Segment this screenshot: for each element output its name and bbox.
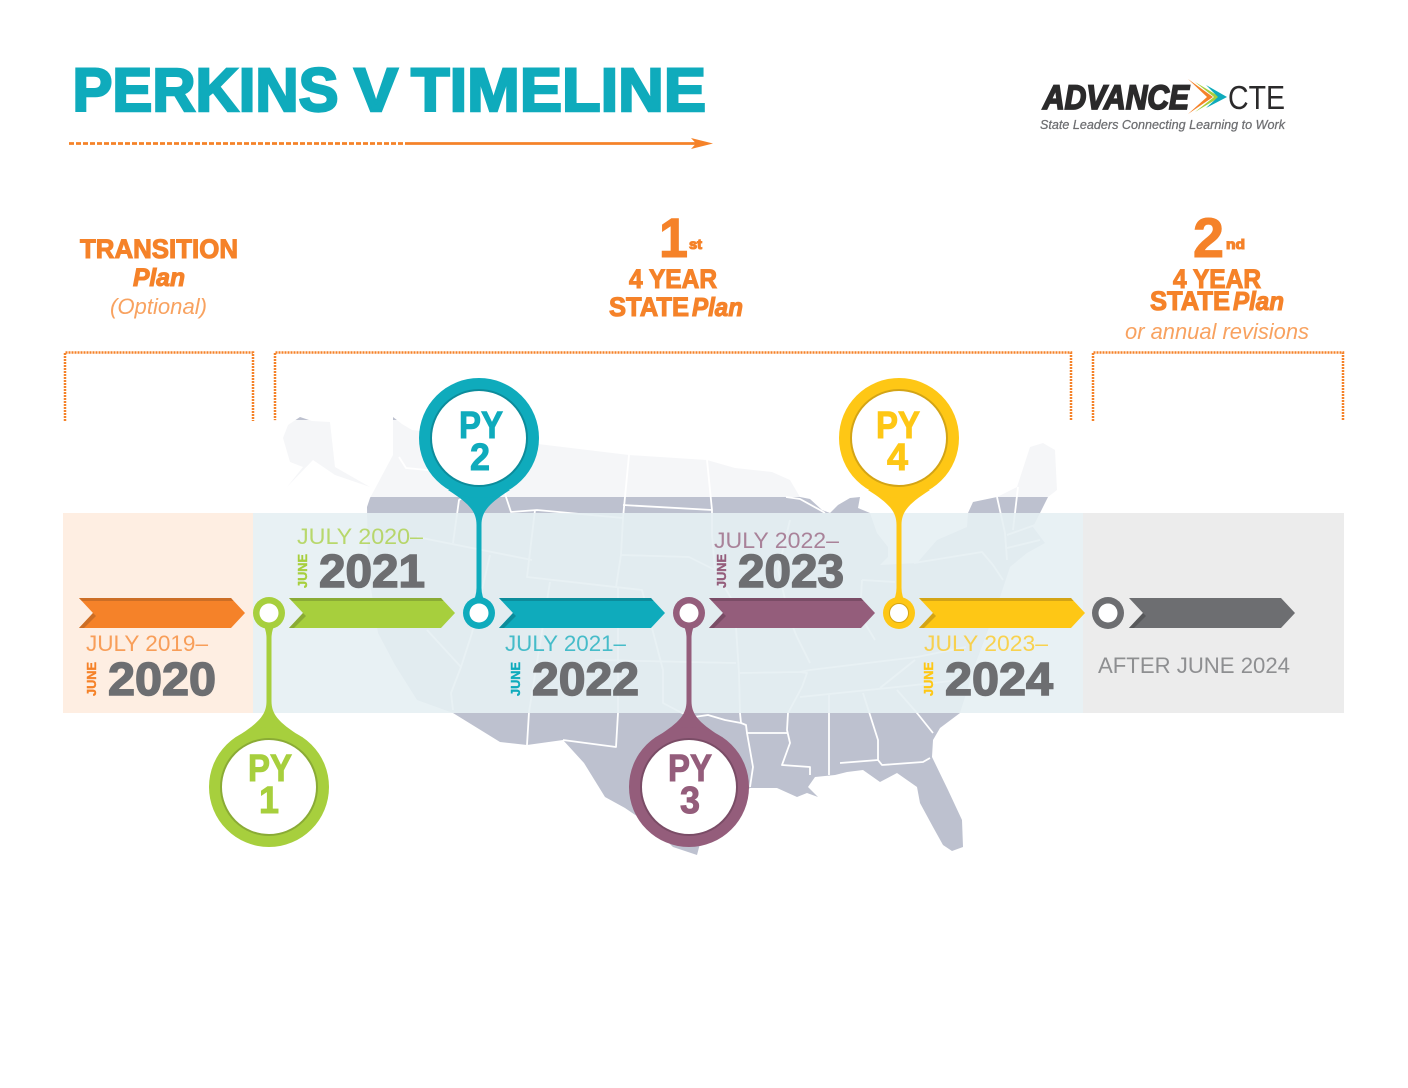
title <box>72 56 706 124</box>
date: 2020-2021: 2021 <box>319 545 425 597</box>
title arrow <box>69 138 713 149</box>
heading: 1st 4 year state plan: STATE <box>609 292 689 322</box>
heading: 2nd 4 year state plan: STATE <box>1150 286 1230 316</box>
date: 2022-2023 <box>714 528 844 597</box>
heading: transition plan: Plan <box>133 264 185 292</box>
pin: PY 4: PY <box>876 405 920 447</box>
pin: PY 2: 2 <box>470 437 490 479</box>
date: 2019-2020: 2020 <box>108 653 216 705</box>
date: 2019-2020: JULY 2019– <box>86 631 209 656</box>
date: 2021-2022 <box>505 631 639 705</box>
date: 2022-2023: 2023 <box>738 545 844 597</box>
arrow: yellow <box>919 598 1085 628</box>
pin: PY 3 <box>629 597 749 847</box>
logo: Advance CTE: State Leaders Connecting Learning to Work <box>1040 118 1286 132</box>
date: 2023-2024 <box>921 631 1053 705</box>
bracket: second state plan <box>1093 352 1343 421</box>
pin: PY 1: PY <box>248 748 292 790</box>
date: 2019-2020 <box>84 631 216 705</box>
heading: 2nd 4 year state plan: Plan <box>1233 286 1284 316</box>
date: 2023-2024: 2024 <box>945 653 1053 705</box>
node: after June 2024 <box>1092 597 1124 629</box>
bracket: transition <box>65 352 253 421</box>
pin: PY 4: 4 <box>887 437 908 479</box>
heading: transition plan: TRANSITION <box>80 234 238 264</box>
heading: 2nd 4 year state plan: nd <box>1226 236 1245 252</box>
heading: transition plan: (Optional) <box>110 294 207 319</box>
logo: Advance CTE: CTE <box>1228 79 1285 116</box>
pin: PY 3: 3 <box>680 780 700 822</box>
bracket: first state plan <box>275 352 1071 421</box>
heading: transition plan <box>80 234 238 319</box>
logo: Advance CTE: ADVANCE <box>1042 79 1190 117</box>
band: transition year <box>63 513 253 713</box>
arrow: orange <box>79 598 245 628</box>
date: 2022-2023: JUNE <box>714 554 729 588</box>
band: first state plan years <box>253 513 1083 713</box>
date: 2019-2020: JUNE <box>84 662 99 696</box>
date: 2021-2022: JULY 2021– <box>505 631 627 656</box>
arrow: green <box>289 598 455 628</box>
heading: 1st 4 year state plan: st <box>689 236 702 252</box>
heading: 1st 4 year state plan: Plan <box>692 292 743 322</box>
arrow: purple <box>709 598 875 628</box>
title: TIMELINE <box>411 56 706 124</box>
title: PERKINS <box>72 56 338 124</box>
heading: 1st 4 year state plan: 4 YEAR <box>629 264 717 294</box>
logo: Advance CTE <box>1040 79 1286 132</box>
date: 2020-2021: JULY 2020– <box>297 524 424 549</box>
heading: 2nd 4 year state plan: 2 <box>1193 206 1224 269</box>
date: 2020-2021: JUNE <box>295 554 310 588</box>
pin: PY 2: PY <box>459 405 503 447</box>
pin: PY 2 <box>419 378 539 629</box>
heading: 1st 4 year state plan: 1 <box>659 206 688 269</box>
pin: PY 3: PY <box>668 748 712 790</box>
date: 2020-2021 <box>295 524 425 597</box>
date: 2023-2024: JULY 2023– <box>924 631 1049 656</box>
date: 2021-2022: JUNE <box>508 662 523 696</box>
arrow: teal <box>499 598 665 628</box>
date: 2021-2022: 2022 <box>532 653 639 705</box>
band: after June 2024 <box>1083 513 1344 713</box>
fade over northern map <box>270 420 1090 497</box>
heading: 2nd 4 year state plan: or annual revisions <box>1125 319 1309 344</box>
arrow: grey <box>1129 598 1295 628</box>
pin: PY 1: 1 <box>259 780 279 822</box>
date: 2023-2024: JUNE <box>921 662 936 696</box>
map of the United States <box>283 417 1057 855</box>
pin: PY 4 <box>839 378 959 629</box>
date: 2022-2023: JULY 2022– <box>714 528 840 553</box>
date: after June 2024: AFTER JUNE 2024 <box>1098 653 1290 678</box>
heading: 2nd 4 year state plan: 4 YEAR <box>1173 264 1261 294</box>
heading: 1st 4 year state plan <box>609 206 743 322</box>
title: V <box>354 56 398 124</box>
pin: PY 1 <box>209 597 329 847</box>
heading: 2nd 4 year state plan <box>1125 206 1309 344</box>
